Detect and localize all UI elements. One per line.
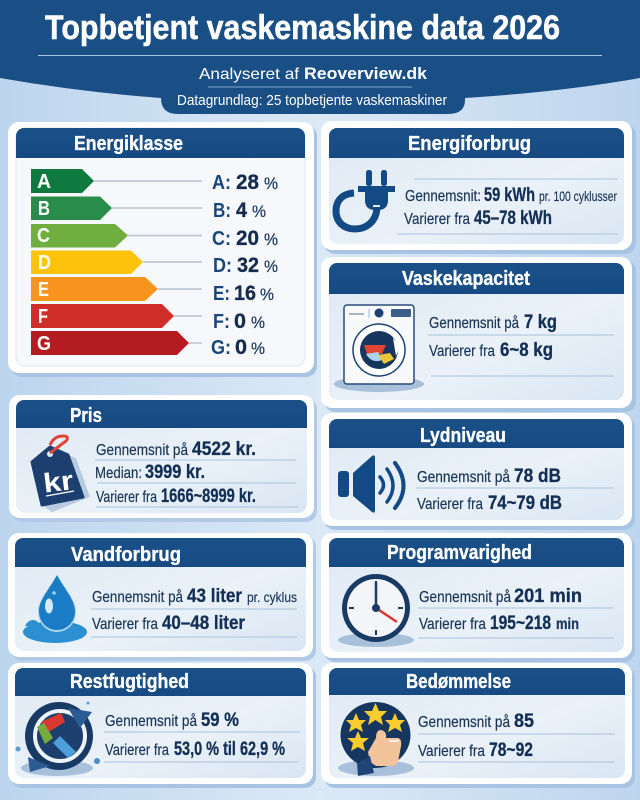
stat lines: Gennemsnit på — [419, 588, 511, 606]
energy class bars: G — [37, 333, 51, 355]
energy class values: % — [260, 285, 274, 304]
stat lines: 1666~8999 kr. — [161, 486, 256, 507]
energy class values: 0 — [235, 336, 247, 359]
stat lines — [416, 466, 614, 514]
stat lines: Varierer fra — [105, 742, 169, 759]
subtitle — [199, 64, 428, 83]
icon: washing machine — [334, 305, 424, 392]
stat lines — [397, 179, 618, 234]
panel: Energiklasse — [8, 122, 317, 377]
heading: Vandforbrug — [71, 543, 181, 566]
heading: Restfugtighed — [70, 670, 189, 693]
icon: spin cycle with clothes — [16, 702, 100, 776]
energy class values — [211, 171, 278, 359]
heading: Vaskekapacitet — [402, 267, 530, 290]
energy class values: % — [264, 257, 278, 276]
energy class values: F: — [213, 311, 230, 333]
stat lines: 4522 kr. — [192, 439, 256, 460]
stat lines: 78 dB — [514, 466, 561, 487]
stat lines: pr. cyklus — [247, 589, 297, 605]
stat lines: 59 % — [201, 710, 239, 731]
energy class bars: A — [37, 171, 51, 193]
stat lines: Varierer fra — [418, 743, 485, 760]
heading: Energiforbrug — [408, 132, 531, 155]
stat lines: 40–48 liter — [162, 613, 246, 634]
stat lines: Median: — [95, 465, 142, 482]
energy class values: E: — [213, 283, 230, 305]
panel: Energiforbrug — [321, 121, 636, 254]
stat lines: Gennemsnit på — [418, 713, 510, 731]
energy class values: 28 — [236, 171, 259, 194]
stat lines: 195~218 — [490, 613, 551, 634]
energy class values: G: — [211, 337, 231, 359]
heading: Pris — [70, 404, 102, 427]
energy class values: 20 — [236, 227, 259, 250]
energy class values: % — [251, 339, 265, 358]
stat lines: Gennemsnit på — [96, 441, 188, 459]
stat lines: Varierer fra — [417, 496, 483, 513]
energy class bars: B — [38, 198, 50, 220]
energy class values: 32 — [237, 254, 259, 277]
stat lines — [428, 312, 614, 376]
heading: Energiklasse — [74, 132, 183, 155]
stat lines: 3999 kr. — [145, 462, 205, 483]
stat lines: 201 min — [514, 586, 582, 607]
energy class bars: C — [37, 225, 50, 247]
heading: Lydniveau — [420, 424, 506, 447]
stat lines — [418, 711, 615, 762]
stat lines — [418, 586, 614, 638]
panel: Pris — [9, 395, 317, 522]
stat lines — [91, 586, 297, 637]
stat lines — [95, 439, 298, 507]
subtitle: Analyseret af — [199, 66, 300, 83]
stat lines: 7 kg — [524, 312, 557, 333]
energy class values: % — [251, 313, 265, 332]
icon: plug — [336, 170, 395, 229]
energy class values: 16 — [234, 282, 256, 305]
icon: speaker — [338, 455, 404, 513]
stat lines: Gennemsnit på — [417, 468, 510, 486]
energy class values: A: — [212, 172, 231, 194]
stat lines: 45–78 kWh — [474, 208, 552, 229]
energy class values: D: — [213, 255, 232, 277]
energy class bars: D — [38, 252, 51, 274]
stat lines: Gennemsnit på — [92, 588, 183, 606]
icon: stars and thumbs up — [338, 702, 414, 776]
energy class bars — [31, 169, 202, 355]
stat lines: Gennemsnit på — [105, 712, 197, 730]
stat lines: 43 liter — [187, 586, 243, 607]
energy class values: % — [252, 202, 266, 221]
panel: Lydniveau — [321, 413, 635, 530]
subtitle: Reoverview.dk — [304, 64, 428, 83]
stat lines: Gennemsnit på — [429, 314, 519, 332]
stat lines: 59 kWh — [484, 185, 535, 206]
icon: clock — [338, 574, 414, 647]
stat lines: 6~8 kg — [500, 340, 553, 361]
stat lines: Varierer fra — [96, 489, 157, 506]
stat lines: Varierer fra — [92, 616, 158, 633]
energy class bars: F — [38, 306, 48, 328]
icon: price tag: kr — [42, 465, 76, 499]
heading: Bedømmelse — [406, 670, 511, 693]
stat lines: Gennemsnit: — [405, 188, 481, 205]
stat lines: 85 — [514, 711, 534, 732]
stat lines: min — [556, 616, 579, 633]
data basis: Datagrundlag: 25 topbetjente vaskemaskiner — [177, 93, 447, 109]
panel: Bedømmelse — [321, 663, 635, 788]
stat lines: 78~92 — [489, 740, 533, 761]
icon: price tag — [32, 436, 90, 512]
energy class values: % — [264, 174, 278, 193]
panel: Vaskekapacitet — [321, 257, 636, 412]
stat lines: 53,0 % til 62,9 % — [174, 739, 285, 760]
header banner — [0, 0, 640, 114]
energy class values: B: — [213, 200, 231, 222]
energy class values: % — [264, 230, 278, 249]
stat lines — [104, 710, 300, 762]
energy class bars: E — [38, 279, 49, 301]
heading: Programvarighed — [387, 541, 532, 564]
panel: Vandforbrug — [8, 533, 316, 661]
title: Topbetjent vaskemaskine data 2026 — [45, 9, 560, 47]
stat lines: Varierer fra — [429, 343, 495, 360]
energy class values: C: — [212, 228, 231, 250]
icon: water drop — [23, 575, 87, 643]
panel: Programvarighed — [321, 533, 635, 662]
stat lines: 74~79 dB — [488, 493, 562, 514]
panel: Restfugtighed — [8, 663, 316, 788]
energy class values: 4 — [236, 199, 247, 222]
stat lines: Varierer fra — [419, 616, 486, 633]
stat lines: Varierer fra — [404, 211, 470, 228]
energy class values: 0 — [234, 310, 246, 333]
